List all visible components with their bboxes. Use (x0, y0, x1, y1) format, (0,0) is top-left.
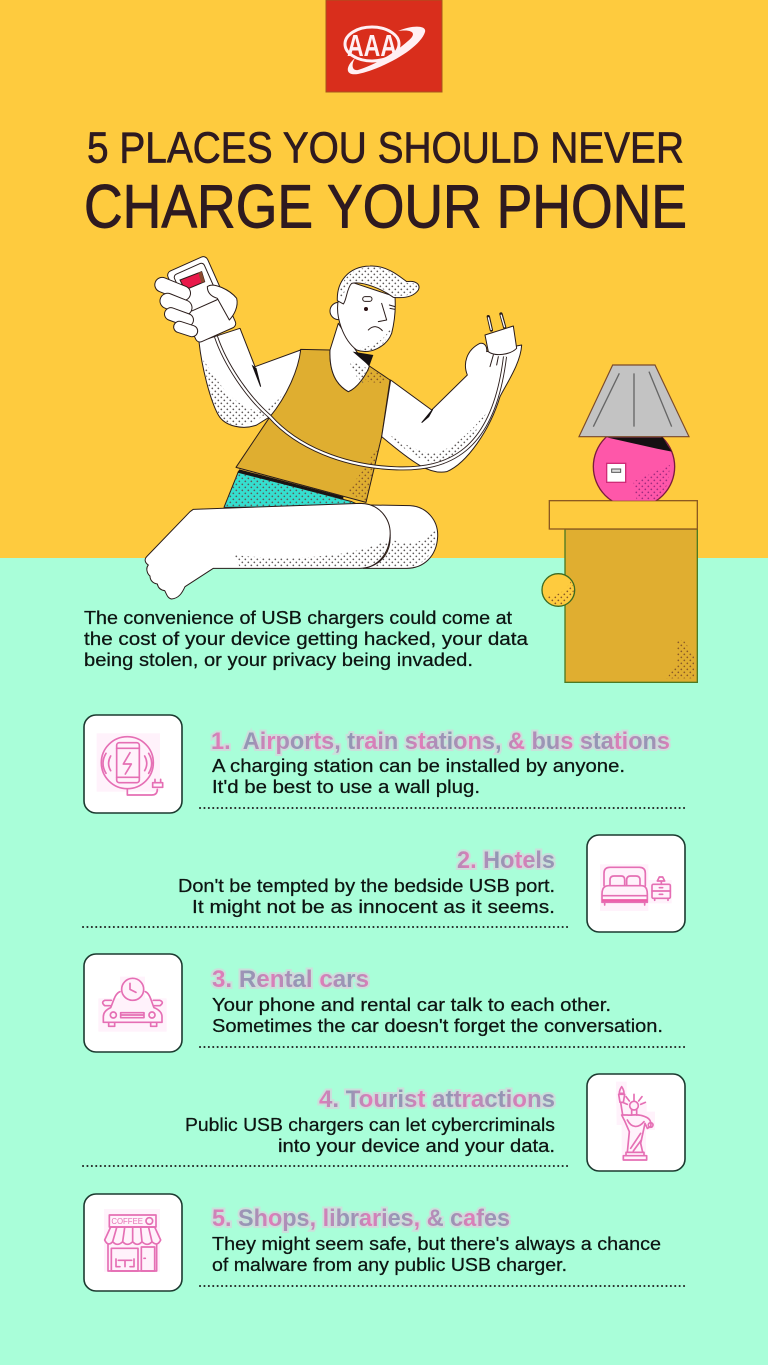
body 3: Sometimes the car doesn't forget the conversation. (212, 1016, 663, 1036)
title (84, 124, 687, 240)
illustration: lamp on nightstand (542, 365, 697, 682)
heading 5: 5. Shops, libraries, & cafes (212, 1205, 510, 1232)
shorts (224, 469, 363, 507)
charging cable (216, 337, 505, 468)
icon: wireless charging phone (97, 733, 163, 795)
nightstand (549, 501, 697, 682)
item 3: rental cars (84, 954, 685, 1052)
body 5: of malware from any public USB charger. (212, 1255, 567, 1275)
icon: coffee shop (104, 1209, 161, 1272)
back knee (363, 505, 438, 568)
icon: car with clock (98, 977, 167, 1032)
intro text: The convenience of USB chargers could come at (84, 608, 512, 628)
body 2: Don't be tempted by the bedside USB port. (178, 876, 555, 896)
title: 5 PLACES YOU SHOULD NEVER (87, 124, 684, 172)
body 4: Public USB chargers can let cybercriminals (185, 1115, 555, 1135)
hair (337, 266, 419, 304)
body 4: into your device and your data. (278, 1136, 555, 1156)
AAA logo: AAA (347, 28, 397, 63)
item 1: airports (84, 715, 685, 813)
front leg and foot (145, 503, 390, 599)
icon: bed and nightstand (600, 864, 672, 911)
tank top (236, 349, 390, 502)
background: mint floor (0, 558, 768, 1365)
body 4 (185, 1115, 555, 1156)
item 4: tourist attractions (83, 1074, 685, 1171)
intro text: being stolen, or your privacy being invaded. (84, 650, 473, 670)
intro text: the cost of your device getting hacked, your data (84, 629, 529, 649)
body 5: They might seem safe, but there's always a chance (212, 1234, 661, 1254)
body 3 (212, 995, 663, 1036)
item 2: hotels (83, 835, 685, 932)
heading 3: 3. Rental cars (212, 966, 369, 993)
heading 2: 2. Hotels (457, 847, 555, 874)
plug (485, 314, 517, 355)
intro text (84, 608, 529, 670)
hand on phone (153, 275, 237, 338)
body 3: Your phone and rental car talk to each other. (212, 995, 611, 1015)
body 2: It might not be as innocent as it seems. (192, 897, 555, 917)
body 1: A charging station can be installed by anyone. (212, 756, 625, 776)
phone (166, 255, 237, 343)
title: CHARGE YOUR PHONE (84, 172, 687, 240)
heading 4: 4. Tourist attractions (319, 1086, 555, 1113)
AAA logo (326, 0, 442, 92)
item 5: shops, libraries, cafes (84, 1194, 685, 1291)
head (330, 266, 419, 351)
body 5 (212, 1234, 661, 1275)
heading 1: 1. Airports, train stations, & bus stations (211, 728, 670, 755)
face features (363, 297, 395, 331)
body 1 (212, 756, 625, 797)
icon: coffee shop: COFFEE (111, 1217, 143, 1226)
icon: statue of liberty (616, 1082, 655, 1160)
neck (330, 323, 373, 392)
raised left arm (199, 328, 301, 427)
lamp base (592, 437, 676, 501)
lamp shade (579, 365, 689, 437)
body 1: It'd be best to use a wall plug. (212, 777, 480, 797)
body 2 (178, 876, 555, 917)
drawer knob (542, 574, 575, 606)
right arm and hand (382, 343, 522, 472)
illustration: man holding phone and plug (145, 255, 522, 599)
background: yellow wall (0, 0, 768, 558)
